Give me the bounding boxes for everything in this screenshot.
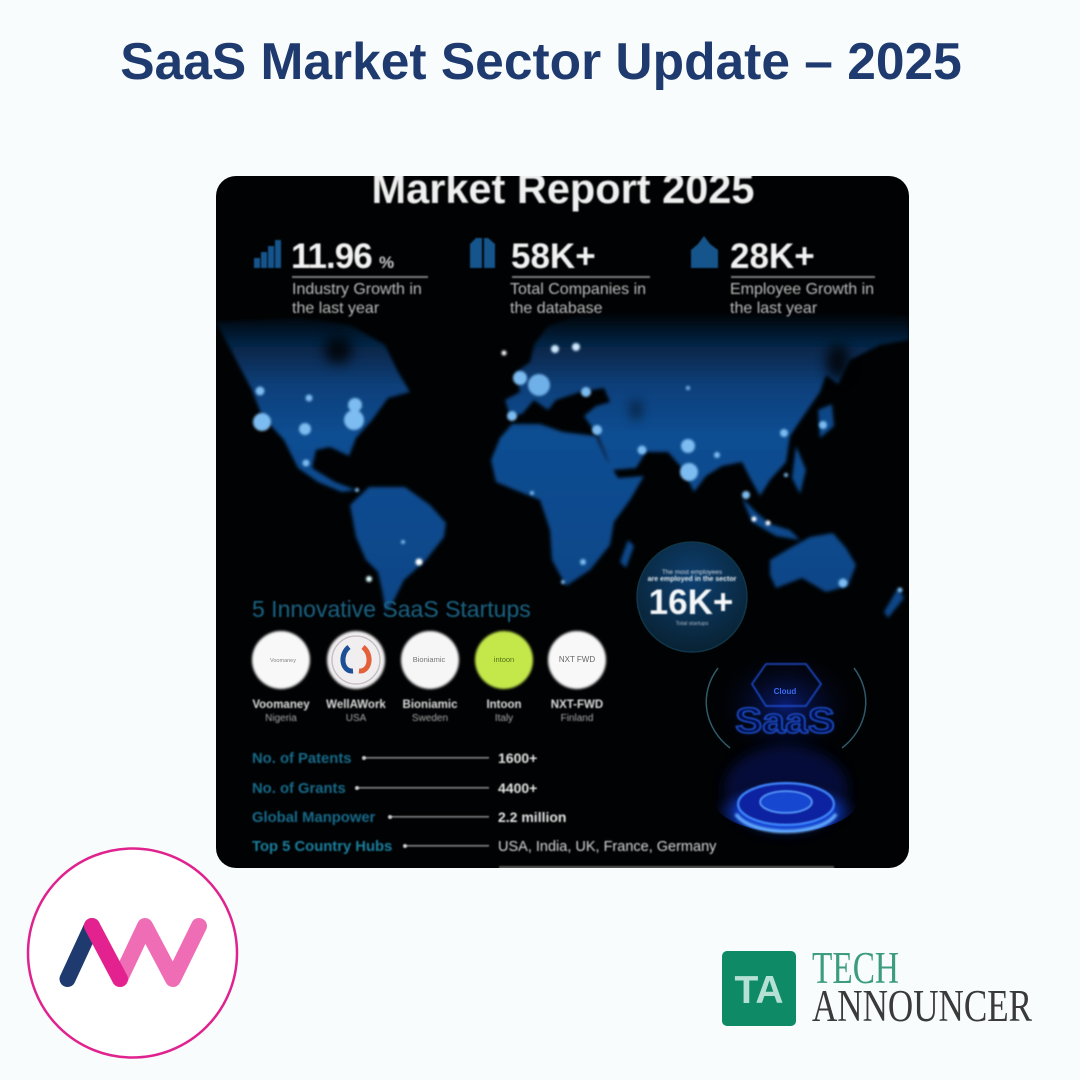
icon: buildings <box>470 238 495 268</box>
fact: manpower <box>252 809 566 826</box>
callout: 16K+ badge: 16K+ <box>649 583 733 622</box>
stat: industry growth: Industry Growth in <box>292 281 422 298</box>
heading: 5 innovative startups: 5 Innovative SaaS Startups <box>252 596 531 622</box>
icon: people <box>691 236 718 268</box>
startup names: Finland <box>561 713 593 724</box>
logo: NXT-FWD: NXT FWD <box>559 655 595 664</box>
stat: employee growth: Employee Growth in <box>730 281 874 298</box>
stat: total companies <box>470 237 650 317</box>
fact: manpower: Global Manpower <box>252 810 376 826</box>
callout: 16K+ badge <box>637 542 747 652</box>
logo: WellAWork <box>327 631 385 689</box>
startup logos <box>252 631 606 689</box>
fact: patents: No. of Patents <box>252 751 351 767</box>
startup names: Italy <box>495 713 513 724</box>
logo: Bioniamic: Bioniamic <box>413 655 446 664</box>
startup names: Nigeria <box>265 713 297 724</box>
callout: 16K+ badge: are employed in the sector <box>648 576 737 583</box>
stat: industry growth: % <box>379 253 394 272</box>
icon: bar chart <box>254 240 281 268</box>
startup names: Voomaney <box>252 699 310 711</box>
logo: Voomaney <box>252 631 310 689</box>
logo: NXT-FWD <box>548 631 606 689</box>
startup names: USA <box>346 713 367 724</box>
fact: grants: No. of Grants <box>252 781 346 797</box>
logo: Intoon <box>475 631 533 689</box>
stat: total companies: 58K+ <box>511 237 596 276</box>
callout: 16K+ badge: The most employees <box>662 569 723 576</box>
logo: Intoon: intoon <box>494 655 514 664</box>
startup names: Bioniamic <box>403 699 458 711</box>
facts list <box>252 750 717 855</box>
logo: Tech Announcer <box>722 943 1032 1031</box>
fact: grants: 4400+ <box>498 780 537 796</box>
logo: Bioniamic <box>401 631 459 689</box>
title: SaaS Market Sector Update – 2025 <box>120 32 962 90</box>
fact: grants <box>252 781 538 794</box>
stat: employee growth: 28K+ <box>730 237 815 276</box>
fact: hubs: USA, India, UK, France, Germany <box>498 839 717 855</box>
icon: SaaS hologram: Cloud <box>774 687 796 696</box>
stat: total companies: the database <box>510 300 603 317</box>
icon: SaaS hologram <box>706 645 866 834</box>
fact: manpower: 2.2 million <box>498 809 566 825</box>
stat: employee growth <box>691 236 875 317</box>
panel: market report image <box>216 165 909 869</box>
world map <box>216 304 909 618</box>
startup names <box>252 699 603 724</box>
stat: total companies: Total Companies in <box>510 281 646 298</box>
fact: hubs <box>252 839 717 855</box>
stat: industry growth: 11.96 <box>291 237 372 276</box>
stat: industry growth: the last year <box>292 300 380 317</box>
logo: Tech Announcer: TECH <box>812 943 899 993</box>
startup names: Sweden <box>412 713 448 724</box>
fact: patents: 1600+ <box>498 750 537 766</box>
logo: Tech Announcer: TA <box>734 969 784 1012</box>
logo: Voomaney: Voomaney <box>270 658 296 664</box>
icon: SaaS hologram: SaaS <box>735 700 835 741</box>
logo: AW circle <box>28 848 237 1058</box>
startup names: NXT-FWD <box>551 699 603 711</box>
map city dots <box>253 343 902 592</box>
heading: market report: Market Report 2025 <box>372 165 754 212</box>
startup names: WellAWork <box>326 699 386 711</box>
stat: industry growth <box>254 237 428 317</box>
startup names: Intoon <box>486 699 522 711</box>
clipped next row <box>499 866 834 869</box>
fact: patents <box>252 751 538 764</box>
fact: hubs: Top 5 Country Hubs <box>252 839 392 855</box>
stat: employee growth: the last year <box>730 300 818 317</box>
callout: 16K+ badge: Total startups <box>676 621 709 627</box>
